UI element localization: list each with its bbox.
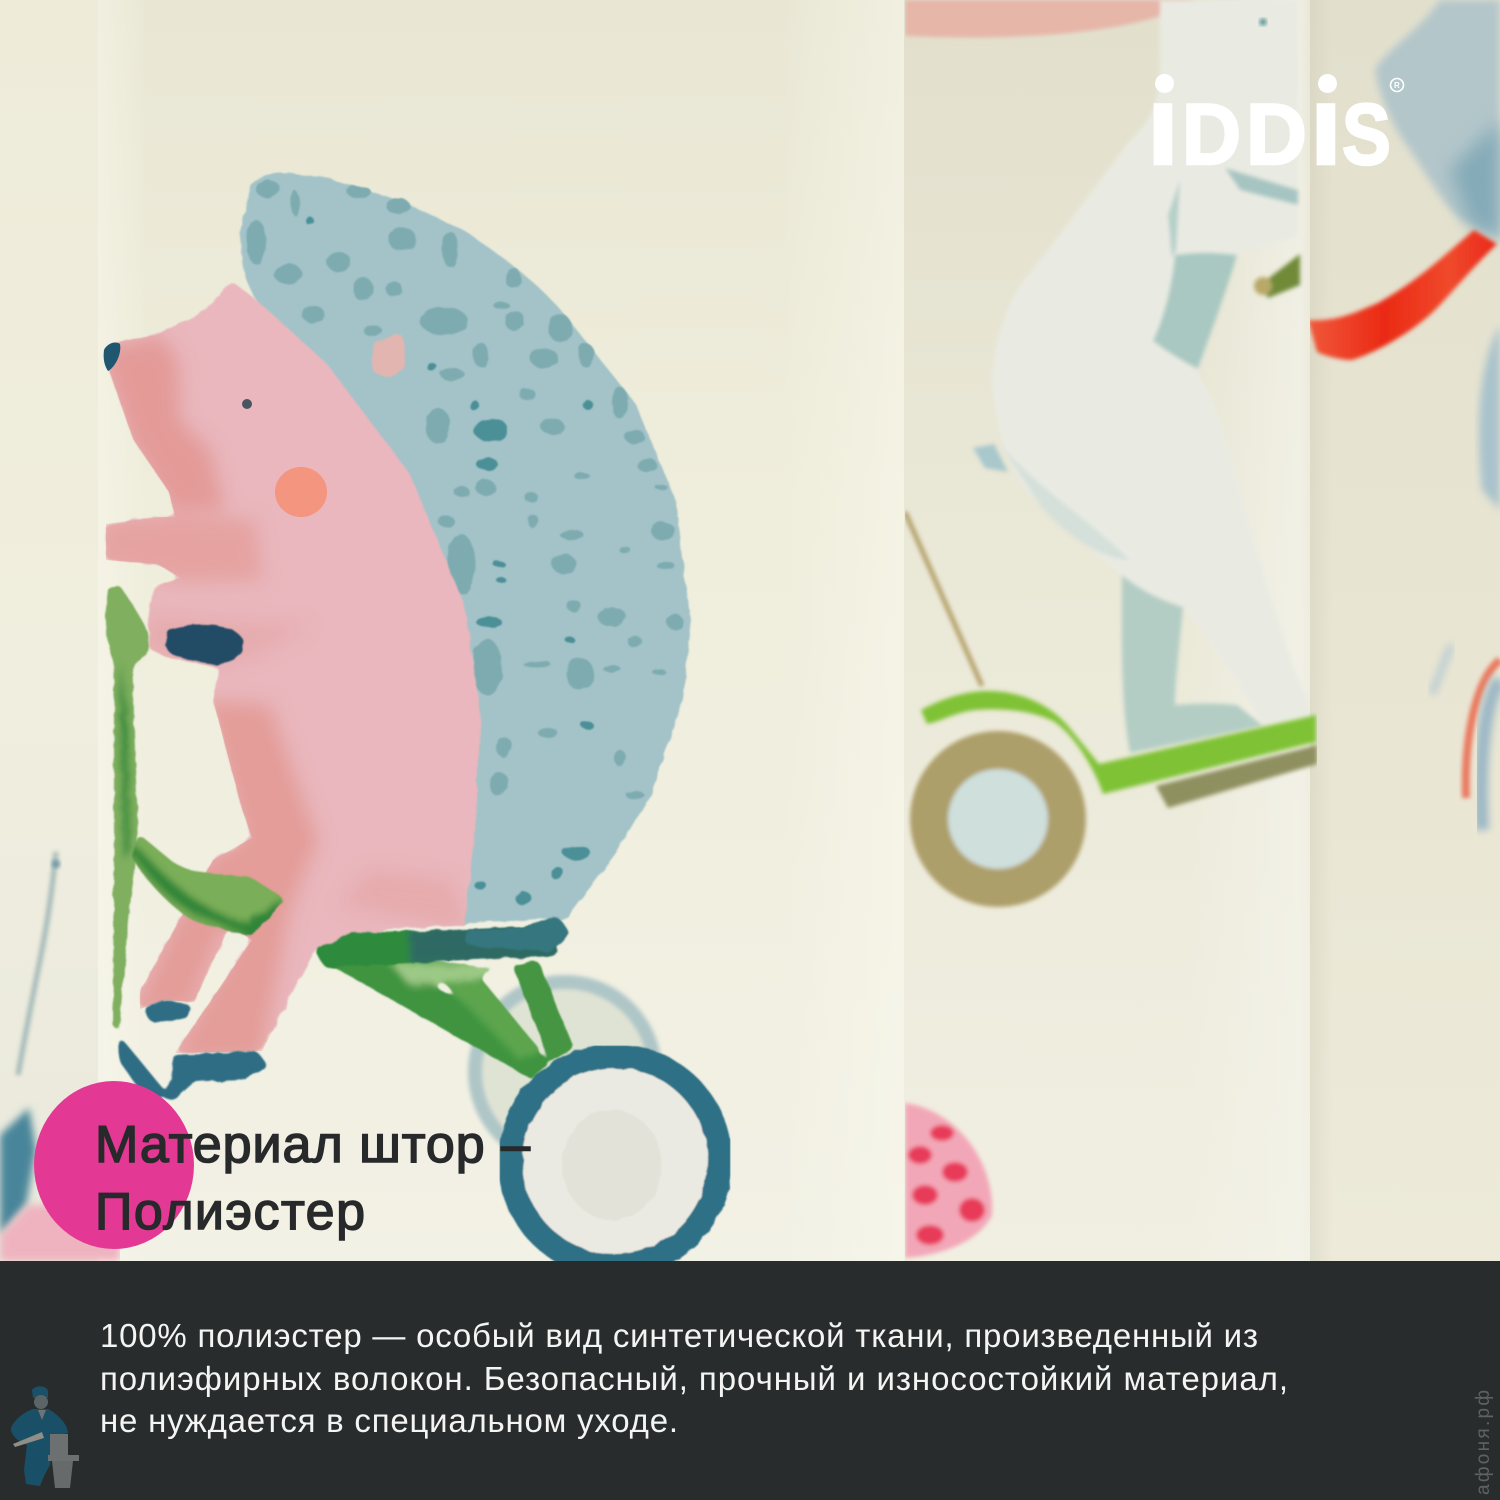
- illustration: hedgehog on a bicycle: [100, 172, 720, 1266]
- logo: iDDiS: D: [1182, 86, 1241, 182]
- eye: [242, 399, 252, 409]
- heading: Полиэстер: [95, 1183, 365, 1241]
- spine spots: [246, 180, 683, 799]
- bear body: [973, 0, 1315, 753]
- front wheel: [510, 1056, 720, 1266]
- shaded chest: [1153, 253, 1237, 369]
- hand on grip: [165, 625, 243, 664]
- icon: plumber with toilet: [11, 1386, 79, 1488]
- deck shadow: [1156, 745, 1317, 808]
- logo: iDDiS: S: [1342, 86, 1391, 182]
- left fold: blurred print: [0, 852, 120, 1261]
- right fold: blurred creature with red scarf: [1308, 0, 1500, 830]
- middle fold: blurred polar bear on a scooter: [905, 0, 1315, 753]
- heading: [95, 1116, 530, 1241]
- body shading: [100, 335, 470, 1060]
- shoes: [119, 1000, 269, 1102]
- rear bicycle tubes: [334, 960, 574, 1080]
- hind leg: [1122, 575, 1263, 753]
- neck shade: [1225, 168, 1298, 205]
- nose: [104, 343, 120, 371]
- logo: iDDiS: I: [1311, 86, 1341, 183]
- body text: [100, 1317, 1288, 1439]
- tail: [973, 444, 1008, 472]
- body text: полиэфирных волокон. Безопасный, прочный и износостойкий материал,: [100, 1360, 1288, 1397]
- heading: Материал штор –: [95, 1116, 530, 1174]
- scooter wheel: [929, 750, 1067, 888]
- handlebar: [1254, 254, 1300, 298]
- pink accent circle: [34, 1081, 194, 1249]
- pink body: [104, 281, 481, 1053]
- rear wheel: [475, 982, 655, 1162]
- body text: 100% полиэстер — особый вид синтетической ткани, произведенный из: [100, 1317, 1258, 1354]
- bear eye: [1260, 18, 1266, 26]
- hedgehog ear: [372, 332, 406, 378]
- cheek: [275, 467, 327, 517]
- logo: iDDiS: R: [1394, 81, 1400, 90]
- logo: iDDiS: D: [1246, 87, 1307, 183]
- watermark: site name: афоня.рф: [1473, 1390, 1494, 1495]
- bottom dark band: [0, 1261, 1500, 1500]
- blurred pink hat: [905, 0, 1195, 38]
- spiny back: [240, 172, 691, 925]
- scooter pole: [905, 512, 982, 686]
- logo: iDDiS: [1148, 74, 1404, 183]
- body text: не нуждается в специальном уходе.: [100, 1402, 678, 1439]
- scooter deck: [921, 691, 1316, 794]
- pink mushroom: [905, 1103, 992, 1258]
- front bicycle tubes: [131, 835, 557, 968]
- logo: iDDiS: I: [1148, 86, 1178, 183]
- steering tube: [106, 585, 150, 1030]
- saddle: [465, 915, 570, 952]
- darker spine spots: [307, 218, 593, 905]
